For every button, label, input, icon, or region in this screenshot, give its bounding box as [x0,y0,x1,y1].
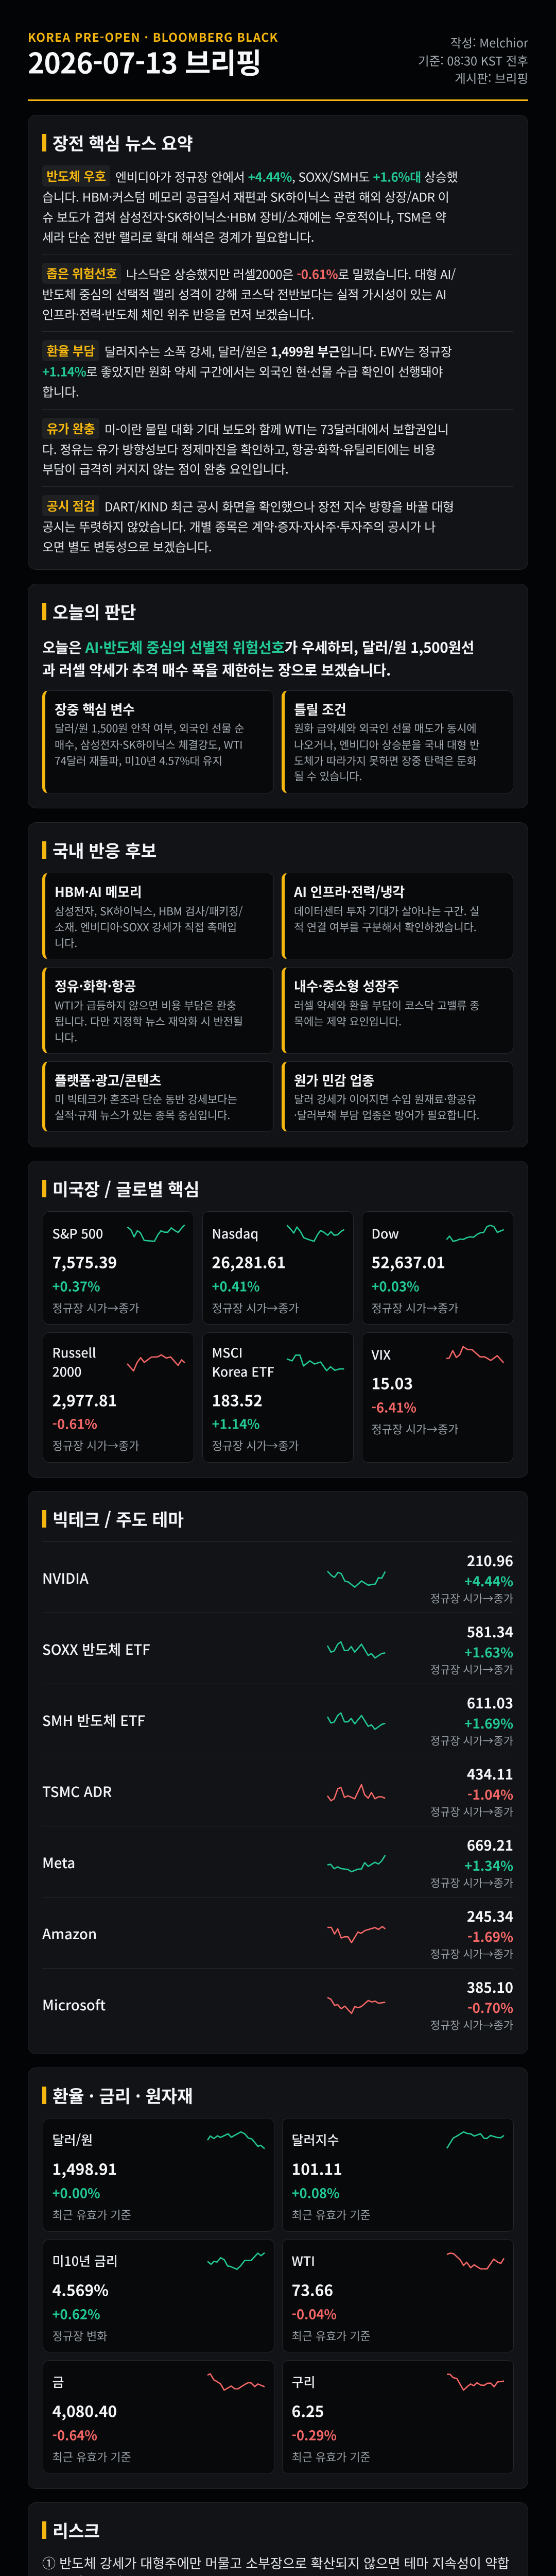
tile: Dow: 52,637.01 [372,1250,445,1273]
row: TSMC ADR: -1.04% [467,1785,513,1804]
tile: WTI: -0.04% [291,2304,337,2323]
tile: copper: -0.29% [291,2425,337,2444]
row: SMH: 611.03 [467,1692,513,1713]
tile: dollar index: +0.08% [291,2183,340,2202]
tile: Dow: Dow [372,1224,399,1243]
card: key variables: 달러/원 1,500원 안착 여부, 외국인 선물 순 [55,720,244,736]
meta info: 기준: 08:30 KST 전후 [418,52,528,69]
row: Amazon: -1.69% [467,1927,513,1946]
tile: dollar index: 최근 유효가 기준 [291,2207,371,2223]
card: key variables [42,690,274,793]
sparkline: gold [207,2373,265,2391]
news text: FX burden: 합니다. [42,382,79,400]
tile: USD/KRW: 달러/원 [53,2130,93,2149]
tile: Russell 2000: -0.61% [53,1414,97,1433]
card: cost sensitive: ·달러부채 부담 업종은 방어가 필요합니다. [294,1107,479,1123]
tile: VIX: -6.41% [372,1397,416,1416]
tile: Russell 2000: 2000 [53,1362,82,1381]
tile: MSCI Korea ETF: MSCI [212,1343,242,1362]
card: AI infra [282,873,513,959]
tile: WTI [282,2239,514,2352]
row: SMH [42,1692,513,1748]
card: platform ads content: 실적·규제 뉴스가 있는 종목 중심입니다. [55,1107,230,1123]
row: Meta: 정규장 시가→종가 [430,1875,513,1890]
panel: today's view [28,584,528,808]
card: platform ads content: 플랫폼·광고/콘텐츠 [55,1071,161,1090]
news text: narrow risk appetite: 반도체 중심의 선택적 랠리 성격이 강해 코스닥 전반보다는 실적 가시성이 있는 AI [42,284,446,302]
card: cost sensitive: 달러 강세가 이어지면 수입 원재료·항공유 [294,1091,477,1107]
tile: copper: 최근 유효가 기준 [291,2449,371,2465]
sparkline: TSMC [327,1784,386,1802]
tile: copper: 6.25 [291,2399,324,2421]
card: domestic small caps: 목에는 제약 요인입니다. [294,1013,402,1029]
card: HBM AI memory: 니다. [55,935,77,951]
news text: oil relief [42,419,448,477]
judgement statement: 오늘은 AI·반도체 중심의 선별적 위험선호가 우세하되, 달러/원 1,500원선 [42,637,474,657]
heading: 국내 반응 후보 [53,837,157,862]
meta info: 게시판: 브리핑 [455,69,528,87]
tile: copper [282,2360,514,2474]
row: SMH: SMH 반도체 ETF [42,1709,145,1730]
tile: Nasdaq: 26,281.61 [212,1250,286,1273]
tile: S&P 500: +0.37% [53,1276,100,1295]
heading accent [42,841,46,859]
row: Amazon: 정규장 시가→종가 [430,1946,513,1961]
tile: copper: 구리 [291,2372,316,2391]
row: NVIDIA: 210.96 [467,1550,513,1570]
news text: disclosure check [42,497,454,555]
judgement statement [42,637,474,680]
tile: USD/KRW: 최근 유효가 기준 [53,2207,131,2223]
sparkline: USD/KRW [207,2131,265,2149]
card: refining chemicals airlines: 니다. [55,1029,77,1045]
row: NVIDIA: +4.44% [464,1571,513,1590]
card: domestic small caps: 러셀 약세와 환율 부담이 코스닥 고밸류 종 [294,997,479,1013]
heading: 미국장 / 글로벌 핵심 [53,1176,199,1201]
tile: VIX: VIX [372,1345,391,1364]
card: key variables: 매수, 삼성전자·SK하이닉스 체결강도, WTI [55,737,242,752]
news text: narrow risk appetite [42,264,456,323]
row: Amazon [42,1905,513,1961]
card: cost sensitive: 원가 민감 업종 [294,1071,374,1090]
card: invalidation: 될 수 있습니다. [294,768,362,784]
news text: disclosure check: 공시는 뚜렷하지 않았습니다. 개별 종목은 계약·증자·자사주·투자주의 공시가 나 [42,517,436,535]
card: HBM AI memory: HBM·AI 메모리 [55,882,142,901]
tile: MSCI Korea ETF: +1.14% [212,1414,260,1433]
sparkline: SOXX [326,1641,385,1659]
judgement statement: 과 러셀 약세가 추격 매수 폭을 제한하는 장으로 보겠습니다. [42,659,391,680]
panel: big tech and themes [28,1491,528,2054]
heading: 장전 핵심 뉴스 요약 [53,130,193,155]
tile: gold [42,2360,274,2474]
sparkline: SMH [326,1713,386,1730]
sparkline: NVIDIA [327,1570,386,1588]
news text: FX burden [42,342,452,400]
tag: oil relief: 유가 완충 [47,419,95,437]
sparkline: VIX [446,1346,505,1363]
row: TSMC ADR: 정규장 시가→종가 [430,1804,513,1819]
tile: Russell 2000: Russell [53,1343,96,1362]
header rule [28,99,528,101]
tile: Russell 2000 [42,1332,194,1462]
row: TSMC ADR: 434.11 [467,1763,513,1784]
card: domestic small caps: 내수·중소형 성장주 [294,976,399,995]
panel: FX rates commodities [28,2067,528,2489]
sparkline: Russell 2000 [127,1354,185,1371]
card: AI infra: 데이터센터 투자 기대가 살아나는 구간. 실 [294,903,479,919]
card: refining chemicals airlines: WTI가 급등하지 않으면 비용 부담은 완충 [55,997,236,1013]
meta info: 작성: Melchior [450,33,528,51]
tile: S&P 500: 정규장 시가→종가 [53,1300,139,1316]
news text: semiconductor: 엔비디아가 정규장 안에서 +4.44%, SOXX/SMH도 +1.6%대 상승했 [115,167,458,185]
tile: US 10Y yield [42,2239,274,2352]
news text: disclosure check: DART/KIND 최근 공시 화면을 확인했으나 장전 지수 방향을 바꿀 대형 [105,497,454,515]
tile: VIX: 정규장 시가→종가 [372,1421,458,1437]
tile: Nasdaq: Nasdaq [212,1224,258,1243]
sparkline: Dow [446,1225,505,1242]
tile: US 10Y yield: +0.62% [53,2304,100,2323]
tile: MSCI Korea ETF [202,1332,354,1462]
card: cost sensitive [282,1061,513,1132]
card: key variables: 장중 핵심 변수 [55,700,135,719]
row: SOXX: +1.63% [464,1642,513,1662]
tile: S&P 500: S&P 500 [53,1224,103,1243]
news text: semiconductor: 습니다. HBM·커스텀 메모리 공급질서 재편과 SK하이닉스 관련 해외 상장/ADR 이 [42,187,449,205]
heading accent [42,2087,46,2104]
panel: US and global [28,1161,528,1478]
news text: semiconductor: 세라 단순 전반 랠리로 확대 해석은 경계가 필요합니다. [42,227,314,245]
tag: narrow risk appetite: 좁은 위험선호 [46,264,117,282]
sparkline: copper [447,2374,505,2391]
card: invalidation: 도체가 따라가지 못하면 장중 탄력은 둔화 [294,753,477,768]
row: SOXX: 정규장 시가→종가 [430,1662,513,1677]
news text: semiconductor: 슈 보도가 겹쳐 삼성전자·SK하이닉스·HBM 장비/소재에는 우호적이나, TSM은 약 [42,207,446,225]
card: invalidation: 틀릴 조건 [294,700,346,719]
card: refining chemicals airlines: 정유·화학·항공 [55,976,136,995]
tile: WTI: 73.66 [291,2278,333,2301]
card: refining chemicals airlines [42,967,274,1054]
row: SOXX: SOXX 반도체 ETF [42,1638,150,1659]
risk text: ① 반도체 강세가 대형주에만 머물고 소부장으로 확산되지 않으면 테마 지속성이 약합 [42,2553,510,2572]
tile: VIX: 15.03 [372,1371,413,1394]
tile: Dow [361,1211,513,1325]
heading: 환율 · 금리 · 원자재 [53,2082,193,2108]
card: HBM AI memory [42,873,274,959]
tile: VIX [361,1332,513,1462]
heading accent [42,1510,46,1528]
panel: news summary [28,115,528,570]
row: Microsoft: -0.70% [467,1998,513,2017]
tile: Dow: 정규장 시가→종가 [372,1300,458,1316]
tile: USD/KRW: +0.00% [53,2183,100,2202]
card: AI infra: 적 연결 여부를 구분해서 확인하겠습니다. [294,919,477,935]
tile: dollar index: 달러지수 [291,2130,339,2149]
tile: gold: -0.64% [53,2425,97,2444]
sparkline: S&P 500 [127,1224,185,1242]
news text: disclosure check: 오면 별도 변동성으로 보겠습니다. [42,537,212,555]
tile: Russell 2000: 2,977.81 [53,1388,117,1411]
news text: semiconductor [42,167,458,245]
row: NVIDIA [42,1550,513,1606]
sparkline: dollar index [446,2131,505,2149]
card: platform ads content: 미 빅테크가 혼조라 단순 동반 강세보다는 [55,1091,237,1107]
tag: disclosure check: 공시 점검 [47,496,95,514]
tile: WTI: 최근 유효가 기준 [291,2328,371,2344]
tile: dollar index [282,2118,514,2232]
news text: narrow risk appetite: 나스닥은 상승했지만 러셀2000은 -0.61%로 밀렸습니다. 대형 AI/ [126,264,456,282]
tile: dollar index: 101.11 [291,2157,342,2179]
row: TSMC ADR [42,1763,513,1819]
row: Meta: 669.21 [467,1834,513,1855]
panel: risks [28,2502,528,2576]
sparkline: Amazon [327,1926,386,1943]
card: platform ads content [42,1061,274,1132]
sparkline: Meta [327,1855,386,1872]
header [28,28,528,101]
row: Microsoft: 정규장 시가→종가 [430,2017,513,2032]
tile: WTI: WTI [291,2251,315,2270]
panel: domestic candidates [28,822,528,1147]
tile: US 10Y yield: 정규장 변화 [53,2328,107,2344]
row: Meta: +1.34% [464,1856,513,1875]
title: 2026-07-13 브리핑 [28,40,262,81]
row: Microsoft: 385.10 [467,1976,513,1997]
row: SMH: +1.69% [464,1714,513,1733]
tag: semiconductor: 반도체 우호 [46,166,106,184]
heading accent [42,2521,46,2539]
tile: gold: 금 [53,2372,64,2391]
tile: MSCI Korea ETF: 183.52 [212,1388,263,1411]
row: SOXX: 581.34 [467,1621,513,1641]
news text: FX burden: 달러지수는 소폭 강세, 달러/원은 1,499원 부근입니다. EWY는 정규장 [105,342,452,360]
row: SMH: 정규장 시가→종가 [430,1733,513,1748]
sparkline: US 10Y yield [207,2252,265,2270]
tile: MSCI Korea ETF: 정규장 시가→종가 [212,1437,299,1454]
row: NVIDIA: NVIDIA [42,1567,89,1588]
tag: FX burden: 환율 부담 [47,341,95,359]
tile: US 10Y yield: 미10년 금리 [53,2251,118,2270]
sparkline: Nasdaq [286,1225,345,1242]
heading accent [42,1180,46,1197]
row: Microsoft [42,1976,513,2032]
row: TSMC ADR: TSMC ADR [42,1781,112,1801]
tile: USD/KRW [42,2118,274,2232]
heading: 빅테크 / 주도 테마 [53,1506,184,1531]
tile: gold: 최근 유효가 기준 [53,2449,131,2465]
card: invalidation: 나오거나, 엔비디아 상승분을 국내 대형 반 [294,737,479,752]
news text: oil relief: 부담이 급격히 커지지 않는 점이 완충 요인입니다. [42,459,288,477]
row: SOXX [42,1621,513,1677]
card: HBM AI memory: 소재. 엔비디아·SOXX 강세가 직접 촉매입 [55,919,237,935]
tile: USD/KRW: 1,498.91 [53,2157,117,2179]
row: NVIDIA: 정규장 시가→종가 [430,1590,513,1606]
card: invalidation [282,690,513,793]
tile: MSCI Korea ETF: Korea ETF [212,1362,274,1381]
news text: narrow risk appetite: 인프라·전력·반도체 체인 위주 반응을 먼저 보겠습니다. [42,304,314,323]
row: Microsoft: Microsoft [42,1994,106,2014]
tile: Dow: +0.03% [372,1276,420,1295]
tile: Nasdaq: 정규장 시가→종가 [212,1300,299,1316]
card: domestic small caps [282,967,513,1054]
sparkline: Microsoft [327,1997,385,2014]
news text: oil relief: 다. 정유는 유가 방향성보다 정제마진을 확인하고, 항공·화학·유틸리티에는 비용 [42,439,436,457]
card: invalidation: 원화 급약세와 외국인 선물 매도가 동시에 [294,720,477,736]
kicker: KOREA PRE-OPEN · BLOOMBERG BLACK [28,28,278,45]
sparkline: MSCI Korea ETF [286,1354,344,1371]
sparkline: WTI [447,2252,505,2270]
tile: US 10Y yield: 4.569% [53,2278,109,2301]
row: Meta: Meta [42,1852,75,1872]
tile: Nasdaq: +0.41% [212,1276,260,1295]
row: Amazon: Amazon [42,1923,97,1943]
tile: Nasdaq [202,1211,354,1325]
news text: FX burden: +1.14%로 좋았지만 원화 약세 구간에서는 외국인 현·선물 수급 확인이 선행돼야 [42,362,443,380]
news text: oil relief: 미-이란 물밑 대화 기대 보도와 함께 WTI는 73달러대에서 보합권입니 [105,419,448,437]
heading: 리스크 [53,2517,100,2543]
heading: 오늘의 판단 [53,599,136,624]
heading accent [42,134,46,151]
card: AI infra: AI 인프라·전력/냉각 [294,882,405,901]
tile: Russell 2000: 정규장 시가→종가 [53,1437,139,1454]
tile: gold: 4,080.40 [53,2399,117,2421]
meta info [418,33,528,87]
card: key variables: 74달러 재돌파, 미10년 4.57%대 유지 [55,753,222,768]
card: HBM AI memory: 삼성전자, SK하이닉스, HBM 검사/패키징/ [55,903,243,919]
row: Amazon: 245.34 [467,1905,513,1926]
row: Meta [42,1834,513,1890]
tile: S&P 500: 7,575.39 [53,1250,117,1273]
tile: S&P 500 [42,1211,194,1325]
heading accent [42,603,46,620]
card: refining chemicals airlines: 됩니다. 다만 지정학 뉴스 재악화 시 반전될 [55,1013,243,1029]
